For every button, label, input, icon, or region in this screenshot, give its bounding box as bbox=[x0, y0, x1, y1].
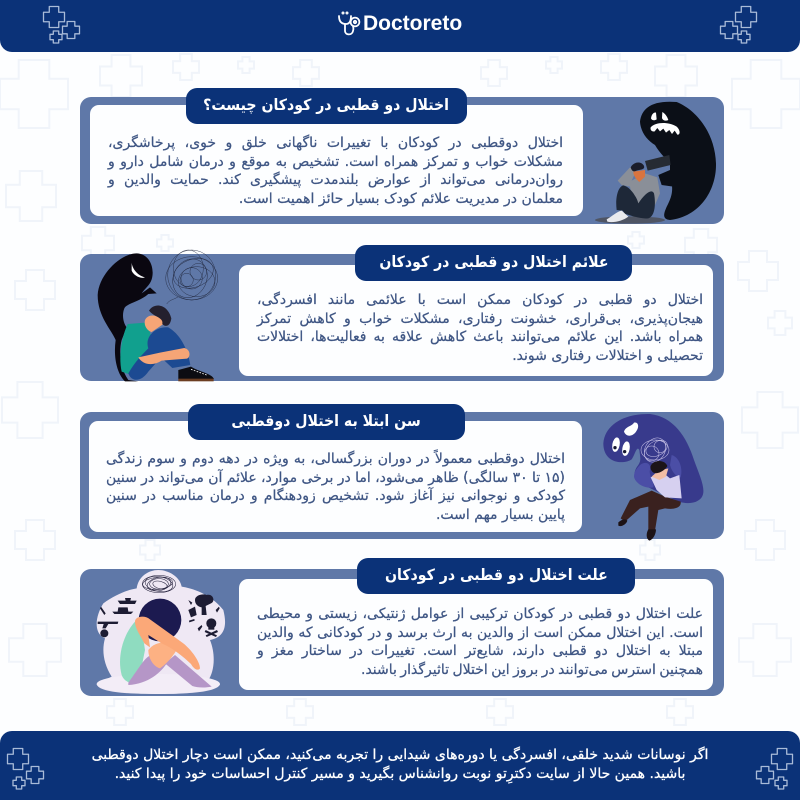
heading bbox=[186, 88, 467, 124]
illustration: black monster looming over seated man bbox=[595, 102, 716, 224]
text card bbox=[239, 579, 713, 690]
panel background bbox=[80, 254, 724, 381]
body text: مبتلا به اختلال دو قطبی دارند، شایع‌تر است. تغییرات در ساختار مغز و bbox=[257, 643, 703, 659]
icon: header medical crosses left bbox=[42, 6, 80, 44]
panel: what is bipolar disorder in children bbox=[80, 88, 724, 224]
heading: علائم اختلال دو قطبی در کودکان bbox=[379, 253, 608, 271]
body text: همراه باشد. این علائم می‌توانند باعث کاهش علاقه به فعالیت‌ها، اختلالات bbox=[257, 329, 703, 345]
body text: تحصیلی و اختلالات رفتاری شوند. bbox=[512, 348, 703, 364]
heading bbox=[357, 558, 635, 594]
footer text: باشید. همین حالا از سایت دکترِتو نوبت روانشناس بگیرید و مسیر کنترل احساسات خود را پیدا کنید. bbox=[115, 766, 685, 782]
text card bbox=[90, 105, 583, 216]
body text: اختلال دو قطبی در کودکان ممکن است با علائمی مانند افسردگی، bbox=[257, 292, 703, 308]
body text: است. این اختلال ممکن است از والدین به ارث برسد و در کودکانی که والدین bbox=[257, 624, 703, 640]
panel: age of onset of bipolar disorder bbox=[80, 404, 724, 541]
body text: مشکلات خواب و تمرکز همراه است. تشخیص به موقع و درمان شامل دارو و bbox=[108, 154, 563, 170]
body text: کودکی و نوجوانی نیز آغاز شود. تشخیص زودهنگام و درمان مناسب در سنین bbox=[106, 488, 565, 504]
panel background bbox=[80, 412, 724, 539]
heading: سن ابتلا به اختلال دوقطبی bbox=[232, 412, 421, 430]
panel background bbox=[80, 569, 724, 696]
heading: علت اختلال دو قطبی در کودکان bbox=[385, 566, 607, 584]
icon: footer medical crosses right bbox=[756, 748, 794, 790]
panel: cause of bipolar disorder in children bbox=[80, 558, 724, 696]
body text: علت اختلال دو قطبی در کودکان ترکیبی از عوامل ژنتیکی، زیستی و محیطی bbox=[257, 606, 703, 622]
heading bbox=[355, 245, 632, 281]
icon: header medical crosses right bbox=[720, 6, 758, 44]
body text bbox=[106, 449, 566, 523]
logo bbox=[338, 12, 462, 36]
body text bbox=[256, 291, 703, 364]
panel background bbox=[80, 97, 724, 224]
illustration: shadow figure behind hunched boy with scribble thought bbox=[98, 250, 218, 382]
panel: symptoms of bipolar disorder in children bbox=[80, 245, 724, 382]
body text bbox=[107, 134, 563, 207]
body text: هیجان‌پذیری، بی‌قراری، خشونت رفتاری، مشکلات خواب و کاهش تمرکز bbox=[257, 310, 703, 326]
body text: روان‌درمانی می‌تواند از عوارض بلندمدت پیشگیری کند. حمایت والدین و bbox=[108, 172, 563, 188]
footer text bbox=[92, 746, 708, 784]
text card bbox=[239, 265, 713, 376]
body text bbox=[256, 606, 703, 678]
icon: stethoscope bbox=[338, 12, 360, 36]
icon: footer medical crosses left bbox=[6, 748, 44, 790]
body text: همچنین استرس می‌توانند در بروز این اختلال تاثیرگذار باشند. bbox=[361, 662, 703, 678]
brand name: Doctoreto bbox=[363, 12, 462, 35]
body text: اختلال دوقطبی در کودکان با تغییرات ناگهانی خلق و خوی، پرخاشگری، bbox=[108, 135, 563, 151]
illustration: blue monster over sitting person bbox=[603, 414, 704, 541]
body text: اختلال دوقطبی معمولاً در دوران بزرگسالی، به ویژه در دهه دوم و سوم زندگی bbox=[106, 451, 565, 467]
header bar bbox=[0, 0, 800, 52]
footer text: اگر نوسانات شدید خلقی، افسردگی یا دوره‌های شیدایی را تجربه می‌کنید، ممکن است دچار اختلال دوقطبی bbox=[92, 747, 708, 763]
body text: معلمان در مدیریت علائم کودک بسیار حائز اهمیت است. bbox=[239, 190, 563, 206]
heading bbox=[188, 404, 465, 440]
heading: اختلال دو قطبی در کودکان چیست؟ bbox=[204, 96, 449, 114]
body text: (۱۵ تا ۳۰ سالگی) ظاهر می‌شود، اما در برخی موارد، علائم آن می‌تواند در سنین bbox=[106, 470, 565, 486]
illustration: girl hugging knees surrounded by dark thoughts bbox=[96, 570, 226, 694]
text card bbox=[89, 421, 582, 532]
footer call to action bbox=[0, 731, 800, 800]
body text: پایین بسیار مهم است. bbox=[436, 506, 565, 522]
